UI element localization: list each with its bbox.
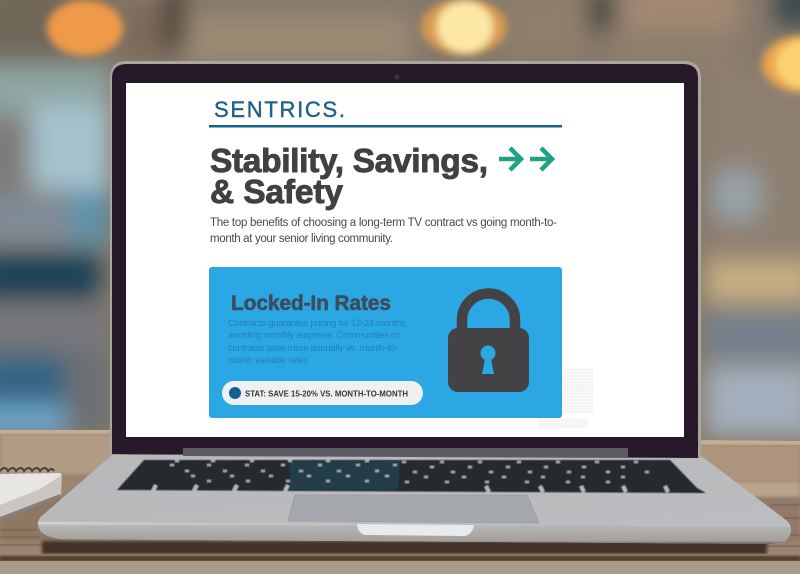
notebook <box>0 468 62 521</box>
header rule <box>209 125 562 128</box>
icon: padlock <box>448 294 529 392</box>
card body text: avoiding monthly surprises. Communities on <box>228 330 401 341</box>
lid frame <box>110 61 701 458</box>
card body text: contracts save more annually vs. month-to- <box>228 343 398 354</box>
title: & Safety <box>210 174 343 211</box>
wooden table <box>0 430 800 574</box>
webcam <box>394 74 400 80</box>
trackpad <box>288 495 539 523</box>
arrows <box>499 148 552 170</box>
logo: SENTRICS. <box>214 97 345 122</box>
subtitle: month at your senior living community. <box>210 233 393 245</box>
blurred cafe background <box>0 0 800 450</box>
card body text: Contracts guarantee pricing for 12-24 months, <box>228 318 408 329</box>
stat pill <box>222 381 423 405</box>
screen <box>126 83 684 437</box>
laptop base <box>38 455 791 544</box>
panel: locked-in rates <box>209 267 562 418</box>
lid notch <box>357 524 474 536</box>
title: Stability, Savings, <box>210 143 488 180</box>
halftone dots <box>538 368 594 428</box>
keyboard <box>117 460 706 493</box>
subtitle: The top benefits of choosing a long-term TV contract vs going month-to- <box>210 217 557 229</box>
card body text: month variable rates <box>228 355 308 366</box>
hinge <box>183 448 628 458</box>
lid bezel <box>112 64 698 458</box>
laptop <box>38 61 791 544</box>
card heading: Locked-In Rates <box>231 292 391 315</box>
stat pill: STAT: SAVE 15-20% VS. MONTH-TO-MONTH <box>245 388 408 398</box>
